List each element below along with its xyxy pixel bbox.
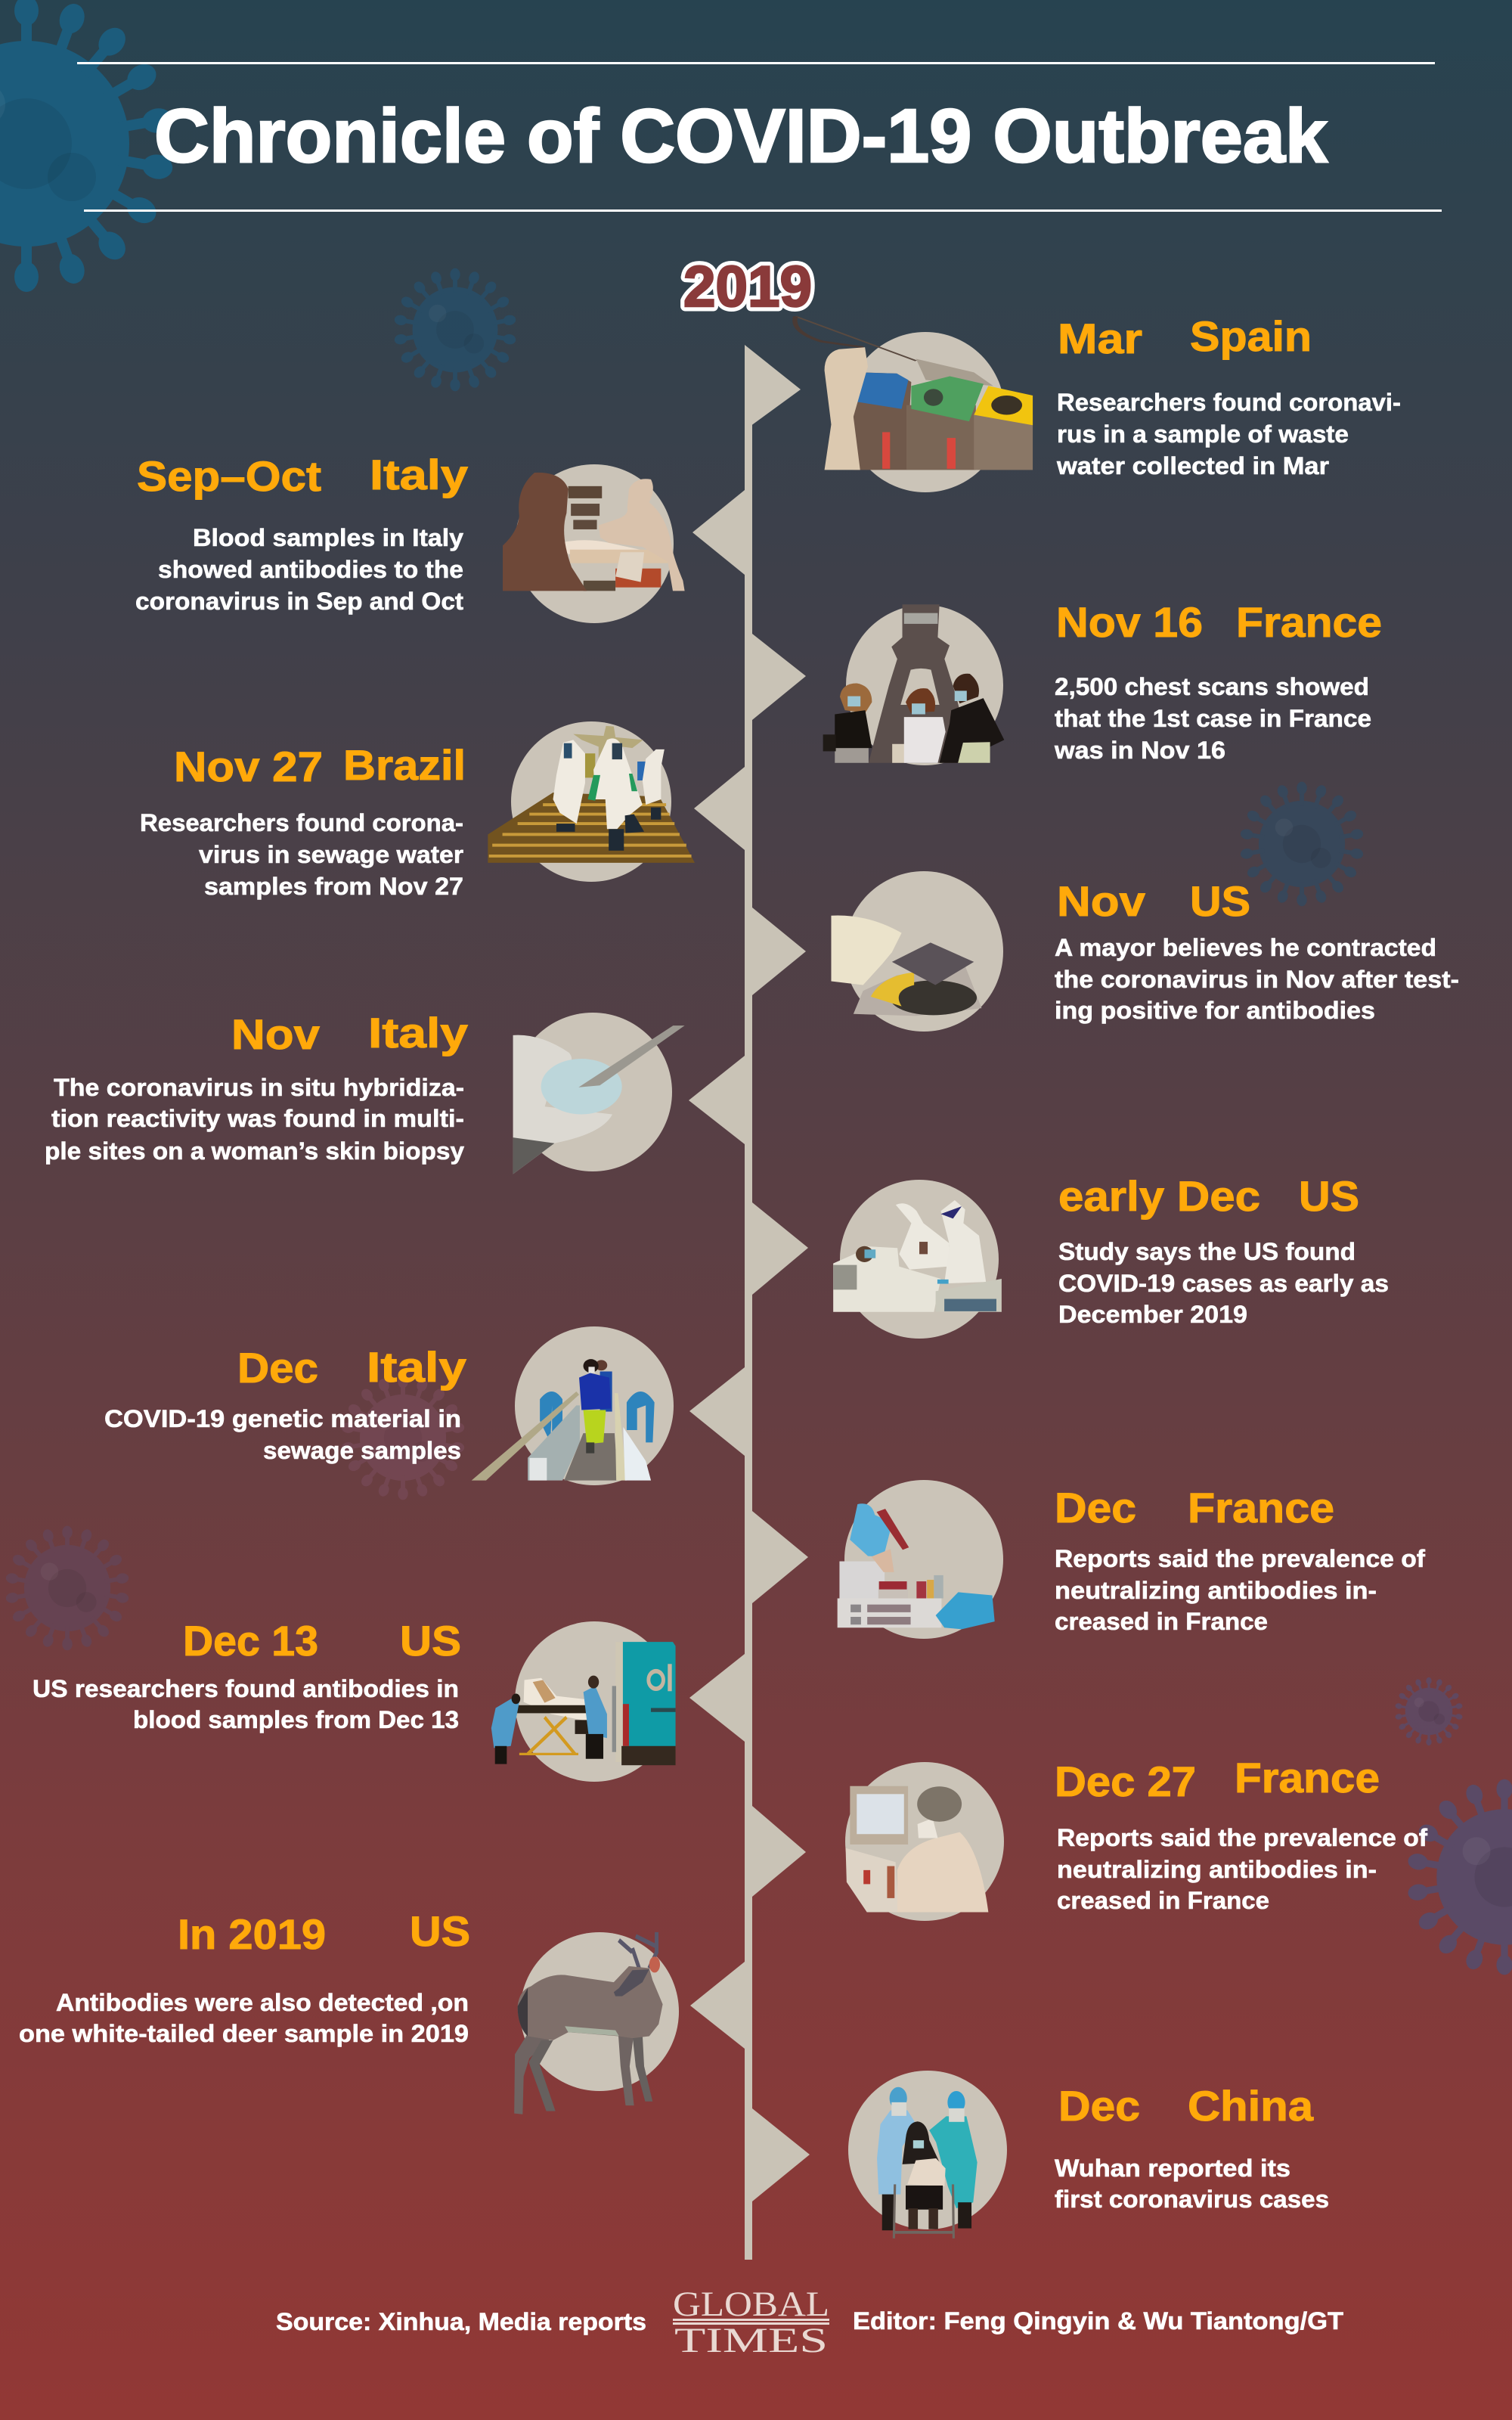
circle — [513, 1013, 672, 1171]
arrow — [752, 1511, 808, 1603]
heading: Brazil — [343, 741, 466, 789]
description — [140, 809, 463, 900]
heading: early Dec — [1058, 1172, 1260, 1220]
description: December 2019 — [1058, 1301, 1247, 1328]
description — [135, 524, 463, 615]
heading: France — [1235, 1754, 1380, 1801]
heading — [231, 1009, 468, 1058]
circle — [840, 1180, 999, 1339]
description: Wuhan reported its — [1055, 2155, 1290, 2182]
heading: US — [410, 1907, 470, 1955]
arrow — [752, 634, 806, 720]
heading — [1058, 1172, 1359, 1220]
arrow — [752, 2108, 810, 2201]
heading — [1055, 1754, 1380, 1805]
circle — [846, 605, 1003, 765]
photo: gloved hand with petri dish — [513, 1025, 685, 1174]
panel: Nov 16 France — [752, 598, 1382, 765]
description: neutralizing antibodies in- — [1055, 1577, 1377, 1604]
panel: Dec Italy — [104, 1326, 745, 1485]
heading — [183, 1617, 461, 1665]
logo: Global Times — [673, 2285, 829, 2360]
description: coronavirus in Sep and Oct — [135, 588, 463, 615]
heading: Italy — [370, 451, 468, 498]
circle — [515, 464, 674, 623]
panel: Dec 27 France — [752, 1754, 1427, 1921]
circle — [520, 1932, 679, 2091]
panel: Mar Spain — [745, 312, 1401, 492]
circle — [845, 1762, 1004, 1921]
logo: Global Times: TIMES — [674, 2321, 828, 2360]
photo: hospital bed and medics — [833, 1200, 1002, 1312]
panel: Nov US — [752, 871, 1459, 1032]
heading: Mar — [1058, 315, 1142, 362]
photo: worker and recycling bins — [795, 316, 1033, 470]
heading — [178, 1907, 470, 1958]
description: neutralizing antibodies in- — [1057, 1856, 1377, 1883]
year label 2019: 2019 — [683, 255, 812, 319]
description: samples from Nov 27 — [204, 873, 463, 900]
panel: Sep-Oct Italy — [135, 451, 745, 623]
heading: US — [400, 1617, 461, 1665]
description: A mayor believes he contracted — [1055, 934, 1436, 961]
heading: Nov 27 — [174, 743, 323, 790]
photo: sanitation workers on stairs — [488, 726, 695, 863]
heading: France — [1188, 1484, 1334, 1531]
description: creased in France — [1055, 1608, 1268, 1635]
title top rule — [77, 62, 1435, 64]
description — [19, 1989, 469, 2047]
photo: gloved hand with test plate — [831, 915, 981, 1016]
description — [1055, 934, 1459, 1024]
heading: Nov — [231, 1010, 320, 1058]
heading — [1056, 598, 1382, 646]
photo: blue gloves and test tubes — [838, 1503, 995, 1629]
heading: Nov — [1057, 877, 1145, 925]
arrow — [745, 345, 801, 430]
description: Blood samples in Italy — [193, 524, 463, 551]
description: first coronavirus cases — [1055, 2186, 1329, 2213]
description: The coronavirus in situ hybridiza- — [54, 1074, 464, 1101]
year label 2019: 2019 — [683, 255, 812, 319]
panel: In 2019 US — [19, 1907, 745, 2114]
heading: Nov 16 — [1056, 598, 1203, 646]
panel: Dec China — [752, 2071, 1329, 2238]
photo: white-tailed deer — [514, 1932, 663, 2114]
circle — [848, 2071, 1007, 2229]
description — [45, 1074, 464, 1165]
title bottom rule — [84, 209, 1442, 212]
description — [1054, 673, 1371, 764]
description: was in Nov 16 — [1054, 737, 1225, 764]
icon: virus right of Nov US — [1240, 782, 1364, 906]
description: water collected in Mar — [1056, 452, 1329, 479]
heading — [1058, 2082, 1314, 2130]
heading — [1055, 1484, 1334, 1531]
timeline spine — [745, 424, 752, 2260]
panel: Dec France — [752, 1480, 1425, 1639]
description: that the 1st case in France — [1055, 705, 1371, 732]
circle — [515, 1326, 674, 1485]
description: Antibodies were also detected ,on — [56, 1989, 469, 2016]
circle — [511, 721, 671, 882]
arrow — [752, 1806, 806, 1897]
description: blood samples from Dec 13 — [133, 1706, 459, 1733]
description — [1056, 389, 1401, 479]
panel: early Dec US — [752, 1172, 1389, 1339]
arrow — [689, 1654, 745, 1742]
photo: lab workers — [503, 473, 685, 591]
arrow — [694, 767, 745, 850]
icon: large virus lower right — [1407, 1779, 1512, 1975]
heading: Dec — [1055, 1484, 1136, 1531]
description — [1057, 1824, 1427, 1914]
arrow — [689, 1056, 745, 1144]
heading — [137, 451, 468, 500]
arrow — [752, 908, 806, 995]
description: virus in sewage water — [199, 841, 463, 868]
photo: ambulance and stretcher — [491, 1642, 676, 1765]
icon: virus upper centre — [394, 268, 516, 391]
heading — [237, 1343, 466, 1392]
description: tion reactivity was found in multi- — [51, 1105, 464, 1132]
arrow — [752, 1202, 808, 1295]
circle — [844, 871, 1003, 1032]
heading: US — [1299, 1172, 1359, 1220]
description: Reports said the prevalence of — [1057, 1824, 1427, 1851]
heading: US — [1190, 877, 1250, 925]
description — [1055, 2155, 1329, 2213]
heading — [1058, 312, 1312, 362]
heading: Sep–Oct — [137, 452, 321, 500]
description — [33, 1675, 459, 1733]
heading: Dec 27 — [1055, 1758, 1196, 1805]
description: showed antibodies to the — [158, 556, 463, 583]
heading: Dec — [237, 1344, 318, 1392]
panel: Nov Italy — [45, 1009, 745, 1174]
description: one white-tailed deer sample in 2019 — [19, 2020, 469, 2047]
photo: medics and patient in wheelchair — [877, 2087, 978, 2238]
arrow — [690, 1962, 745, 2049]
description: ple sites on a woman’s skin biopsy — [45, 1137, 464, 1165]
circle — [515, 1621, 674, 1782]
description: sewage samples — [263, 1437, 461, 1464]
description: COVID-19 genetic material in — [104, 1405, 461, 1432]
heading — [1057, 877, 1250, 925]
heading: China — [1188, 2082, 1314, 2130]
editor credit: Editor: Feng Qingyin & Wu Tiantong/GT — [853, 2307, 1343, 2335]
heading: Spain — [1190, 312, 1312, 360]
heading: Italy — [368, 1009, 468, 1056]
heading: Dec 13 — [183, 1617, 318, 1665]
description — [1055, 1545, 1425, 1635]
photo: nurse at monitor — [846, 1786, 988, 1912]
logo: Global Times: GLOBAL — [673, 2285, 829, 2324]
circle — [844, 1480, 1003, 1639]
arrow — [689, 1367, 745, 1456]
title: Chronicle of COVID-19 Outbreak — [154, 94, 1328, 178]
heading: Dec — [1058, 2082, 1140, 2130]
source credit: Source: Xinhua, Media reports — [276, 2308, 646, 2335]
icon: virus left of Dec 13 — [5, 1526, 129, 1650]
panel: Nov 27 Brazil — [140, 721, 745, 900]
description: ing positive for antibodies — [1055, 997, 1375, 1024]
description: Researchers found coronavi- — [1057, 389, 1401, 416]
icon: large virus top left — [0, 0, 175, 292]
circle — [846, 332, 1005, 492]
description: the coronavirus in Nov after test- — [1055, 966, 1459, 993]
description: Study says the US found — [1058, 1238, 1356, 1265]
photo: Eiffel Tower and three women — [823, 604, 1004, 763]
description: US researchers found antibodies in — [33, 1675, 459, 1702]
icon: small virus right — [1395, 1677, 1463, 1745]
description: creased in France — [1057, 1887, 1269, 1914]
icon: virus behind Dec Italy — [341, 1376, 465, 1500]
arrow — [692, 490, 745, 575]
heading: France — [1236, 598, 1382, 646]
description: Reports said the prevalence of — [1055, 1545, 1425, 1572]
heading: In 2019 — [178, 1910, 326, 1958]
description — [1058, 1238, 1389, 1328]
heading: Italy — [367, 1343, 466, 1391]
description: COVID-19 cases as early as — [1058, 1270, 1389, 1297]
heading — [174, 741, 466, 790]
description: 2,500 chest scans showed — [1055, 673, 1369, 700]
panel: Dec 13 US — [33, 1617, 745, 1782]
description: rus in a sample of waste — [1057, 420, 1349, 448]
photo: sewage plant workers and blue pipes — [472, 1359, 655, 1481]
description — [104, 1405, 461, 1464]
description: Researchers found corona- — [140, 809, 463, 836]
